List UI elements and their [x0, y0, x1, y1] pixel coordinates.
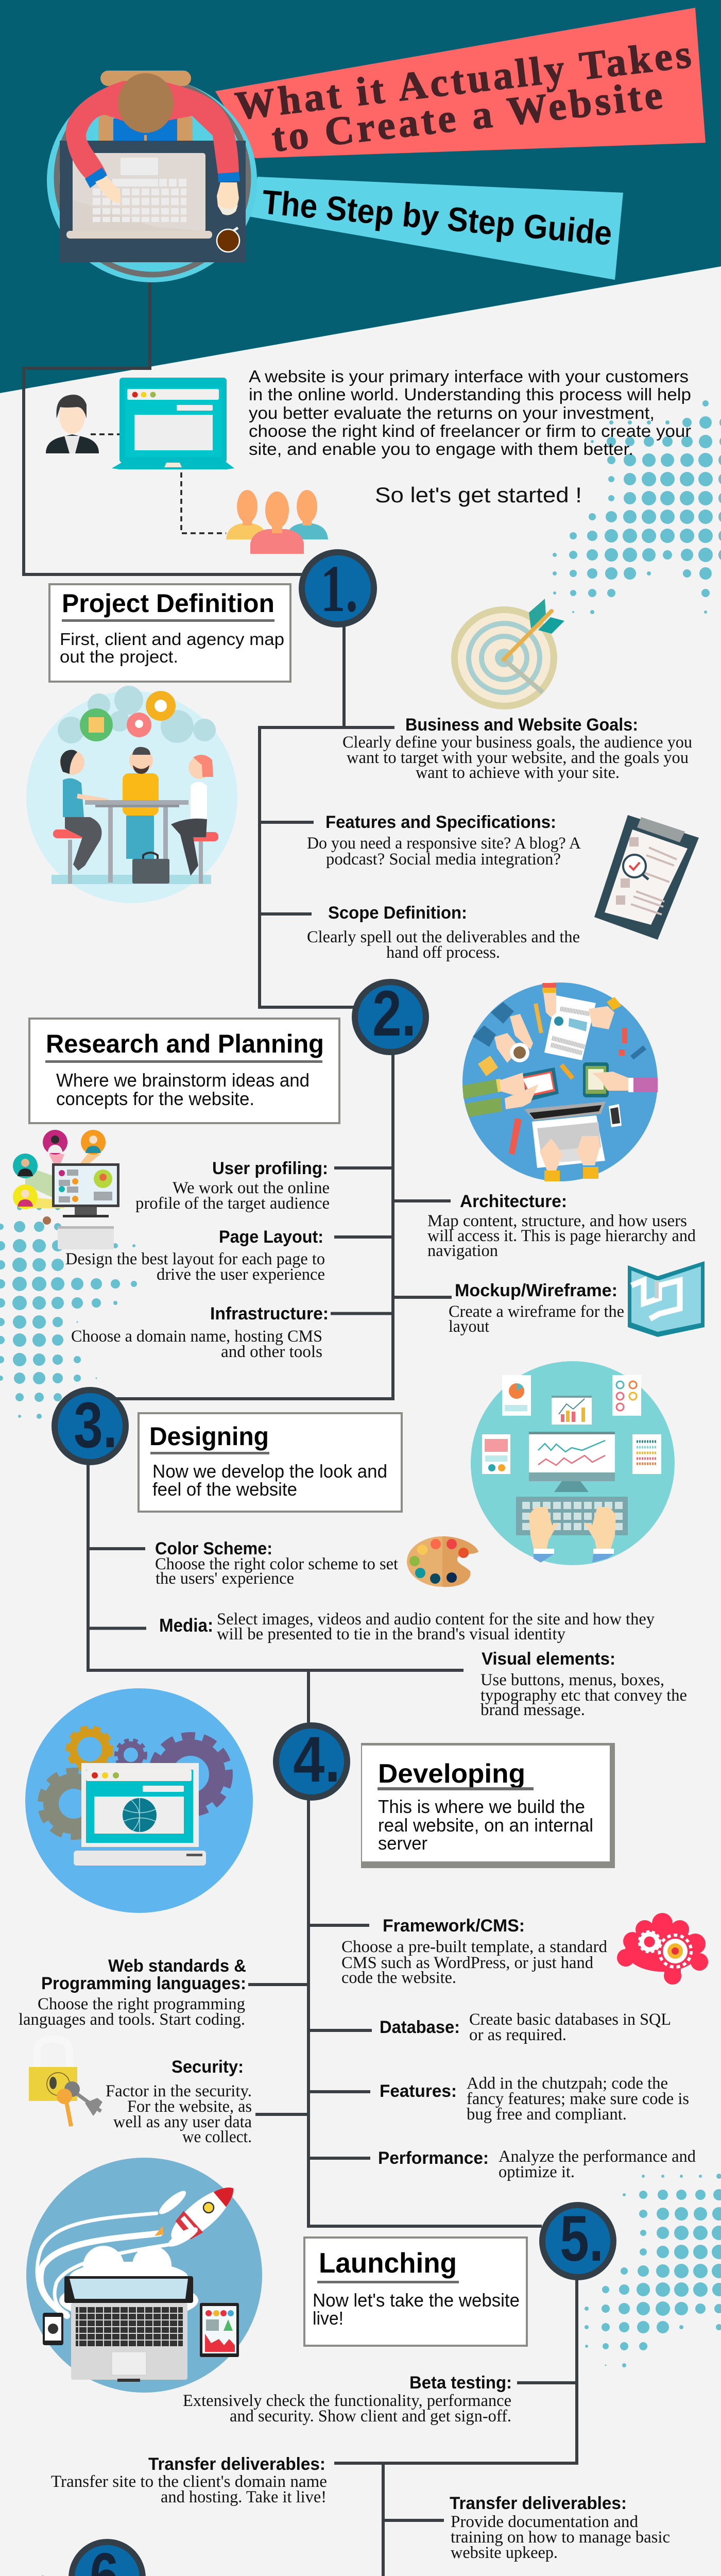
text: architecture: Map content, structure, and how users: [427, 1212, 687, 1230]
icon: clipboard: [594, 815, 699, 940]
text: color scheme: Color Scheme:: [155, 1539, 272, 1558]
lets get started: So let's get started !: [375, 483, 582, 507]
text: transfer deliverables left: Transfer deliverables:: [148, 2454, 325, 2474]
text: beta testing: Beta testing:: [409, 2373, 512, 2393]
step 2 badge: 2.: [372, 978, 416, 1049]
text: scope: hand off process.: [386, 943, 500, 962]
text: business goals: [342, 715, 692, 782]
body: Now we develop the look and: [152, 1461, 387, 1482]
text: framework: CMS such as WordPress, or just hand: [341, 1954, 593, 1972]
halftone dots: left middle: [1, 1208, 134, 1416]
text: media: Select images, videos and audio content for the site and how they: [217, 1610, 655, 1629]
panel: designing: [139, 1413, 402, 1512]
text: transfer deliverables left: and hosting. Take it live!: [161, 2488, 327, 2506]
panel: launching: live!: [313, 2308, 344, 2329]
text: transfer deliverables right: Transfer deliverables:: [450, 2494, 627, 2513]
intro text: you better evaluate the returns on your investment,: [249, 403, 655, 422]
text: features: Features and Specifications:: [325, 812, 556, 832]
text: architecture: will access it. This is page hierarchy and: [427, 1227, 696, 1245]
connector: header to step 1: [24, 276, 309, 574]
panel: developing: [361, 1743, 615, 1868]
illustration: dashboards: [471, 1361, 675, 1565]
text: visual elements: typography etc that convey the: [480, 1686, 687, 1705]
text: database: Create basic databases in SQL: [469, 2010, 671, 2029]
step 5 badge: 5.: [560, 2203, 604, 2275]
text: security: Factor in the security.: [106, 2082, 252, 2100]
intro: dashed links: [91, 434, 226, 533]
text: features: Add in the chutzpah; code the: [467, 2074, 668, 2093]
text: visual elements: brand message.: [480, 1701, 585, 1719]
text: mockup: Create a wireframe for the: [449, 1302, 624, 1321]
step 4 badge: 4.: [293, 1724, 340, 1795]
text: architecture: navigation: [427, 1242, 498, 1260]
intro text: in the online world. Understanding this process will help: [249, 385, 691, 404]
panel: project definition: out the project.: [60, 647, 178, 666]
text: features: [307, 812, 581, 869]
text: database: Database:: [380, 2018, 460, 2037]
illustration: team meeting: [26, 686, 237, 903]
step 1 badge: 1.: [320, 552, 358, 626]
text: web standards: Web standards &: [108, 1956, 246, 1976]
subtitle text: The Step by Step Guide: [261, 182, 614, 252]
halftone dots: top right: [555, 403, 721, 612]
text: transfer deliverables right: Provide documentation and: [451, 2513, 638, 2531]
text: business goals: want to target with your website, and the goals you: [347, 749, 689, 767]
icon: target: [451, 599, 564, 709]
icon: user profiles on monitor: [13, 1130, 119, 1249]
text: framework: Framework/CMS:: [383, 1916, 525, 1936]
text: color scheme: Choose the right color scheme to set: [155, 1555, 398, 1573]
text: infrastructure: Infrastructure:: [210, 1304, 329, 1324]
step 3 badge: 3.: [74, 1389, 117, 1461]
text: transfer deliverables left: Transfer site to the client's domain name: [51, 2472, 327, 2491]
text: color scheme: [155, 1539, 398, 1588]
text: performance: Analyze the performance and: [499, 2147, 696, 2166]
heading: Launching: [319, 2247, 457, 2279]
intro text: [249, 367, 691, 459]
connector lines: step 3: [88, 1465, 540, 2226]
text: framework: [341, 1916, 607, 1987]
text: scope: Clearly spell out the deliverables and the: [307, 928, 580, 946]
text: security: [106, 2057, 252, 2146]
intro text: site, and enable you to engage with them better.: [249, 439, 633, 459]
panel: launching: [304, 2238, 527, 2346]
text: infrastructure: and other tools: [221, 1343, 322, 1361]
intro: client icon: [46, 395, 99, 453]
title text: to Create a Website: [269, 72, 664, 160]
text: user profiling: profile of the target audience: [135, 1194, 330, 1213]
text: business goals: Business and Website Goals:: [405, 715, 638, 735]
connector lines: step 2: [117, 1055, 450, 1399]
text: page layout: Page Layout:: [219, 1227, 323, 1247]
icon: lock and keys: [29, 2039, 102, 2126]
text: visual elements: Use buttons, menus, boxes,: [480, 1671, 664, 1689]
text: database: [380, 2010, 671, 2044]
text: user profiling: We work out the online: [173, 1179, 330, 1197]
icon: wireframe map: [628, 1261, 705, 1337]
text: performance: [378, 2147, 696, 2181]
text: beta testing: [183, 2373, 512, 2426]
text: visual elements: Visual elements:: [482, 1649, 615, 1669]
text: media: Media:: [159, 1615, 213, 1636]
illustration: team at table: [462, 982, 658, 1181]
intro: audience icon: [226, 490, 328, 554]
panel: developing: real website, on an internal: [378, 1815, 593, 1836]
text: mockup: Mockup/Wireframe:: [455, 1281, 617, 1300]
panel: research and planning: [29, 1019, 339, 1123]
halftone dots: right lower: [587, 2176, 719, 2365]
text: page layout: [65, 1227, 325, 1284]
heading: Project Definition: [62, 589, 274, 618]
text: framework: Choose a pre-built template, a standard: [341, 1938, 607, 1956]
text: security: well as any user data: [113, 2113, 252, 2131]
icon: person at laptop: [47, 71, 257, 282]
text: infrastructure: [71, 1304, 329, 1361]
heading: Research and Planning: [46, 1029, 324, 1058]
heading: Developing: [378, 1759, 525, 1789]
text: media: will be presented to tie in the brand's visual identity: [217, 1625, 565, 1643]
text: framework: code the website.: [341, 1969, 456, 1987]
subtitle banner: [248, 177, 623, 280]
icon: cloud gears: [617, 1913, 708, 1985]
text: beta testing: and security. Show client and get sign-off.: [230, 2407, 511, 2426]
text: color scheme: the users' experience: [156, 1569, 294, 1588]
illustration: rocket launch: [26, 2158, 262, 2393]
body: This is where we build the: [378, 1796, 585, 1817]
text: features: Features:: [380, 2081, 457, 2101]
panel: designing: feel of the website: [152, 1479, 297, 1500]
text: scope: [307, 903, 580, 962]
text: transfer deliverables right: [450, 2494, 670, 2562]
text: web standards: Choose the right programming: [38, 1995, 245, 2013]
icon: palette: [407, 1536, 478, 1587]
panel: research and planning: concepts for the website.: [56, 1088, 254, 1109]
text: transfer deliverables right: training on how to manage basic: [451, 2528, 670, 2547]
text: architecture: [427, 1192, 696, 1260]
title text: What it Actually Takes: [233, 31, 693, 128]
text: user profiling: [135, 1159, 330, 1213]
connector lines: step 1: [260, 627, 393, 1007]
text: performance: Performance:: [378, 2148, 489, 2168]
text: media: [159, 1610, 655, 1643]
text: mockup: [449, 1281, 624, 1336]
text: mockup: layout: [449, 1317, 489, 1336]
intro text: A website is your primary interface with your customers: [249, 367, 689, 386]
text: architecture: Architecture:: [460, 1192, 567, 1211]
illustration: gears and browser: [25, 1688, 253, 1913]
text: infrastructure: Choose a domain name, hosting CMS: [71, 1327, 322, 1346]
text: performance: optimize it.: [499, 2163, 575, 2181]
text: beta testing: Extensively check the functionality, performance: [183, 2392, 511, 2410]
step 1 badge: [302, 552, 374, 626]
body: Now let's take the website: [313, 2290, 520, 2311]
text: features: [380, 2074, 689, 2124]
connector lines: step 5: [145, 2280, 577, 2576]
text: features: bug free and compliant.: [467, 2105, 627, 2124]
text: security: For the website, as: [127, 2097, 252, 2116]
text: visual elements: [480, 1649, 687, 1719]
text: page layout: drive the user experience: [157, 1265, 325, 1284]
text: business goals: Clearly define your business goals, the audience you: [342, 733, 692, 752]
text: transfer deliverables right: website upkeep.: [451, 2544, 558, 2562]
text: scope: Scope Definition:: [328, 903, 467, 923]
intro: laptop icon: [112, 378, 234, 469]
title banner: [215, 8, 706, 160]
text: web standards: Programming languages:: [41, 1974, 246, 1993]
text: features: fancy features; make sure code is: [467, 2090, 689, 2108]
text: web standards: languages and tools. Start coding.: [19, 2010, 245, 2029]
text: page layout: Design the best layout for each page to: [65, 1250, 325, 1268]
panel: project definition: [49, 584, 290, 682]
heading: Designing: [149, 1422, 269, 1451]
text: features: podcast? Social media integration?: [326, 850, 561, 869]
body: First, client and agency map: [60, 630, 284, 649]
intro text: choose the right kind of freelancer or firm to create your: [249, 421, 691, 440]
text: business goals: want to achieve with your site.: [416, 764, 620, 782]
body: Where we brainstorm ideas and: [56, 1070, 310, 1091]
text: security: Security:: [171, 2057, 244, 2077]
text: user profiling: User profiling:: [212, 1159, 328, 1178]
text: transfer deliverables left: [51, 2454, 327, 2506]
text: database: or as required.: [469, 2026, 566, 2044]
panel: developing: server: [378, 1833, 427, 1854]
text: features: Do you need a responsive site? A blog? A: [307, 834, 581, 853]
text: web standards: [19, 1956, 246, 2029]
header background: [0, 0, 721, 393]
text: security: we collect.: [182, 2128, 252, 2146]
